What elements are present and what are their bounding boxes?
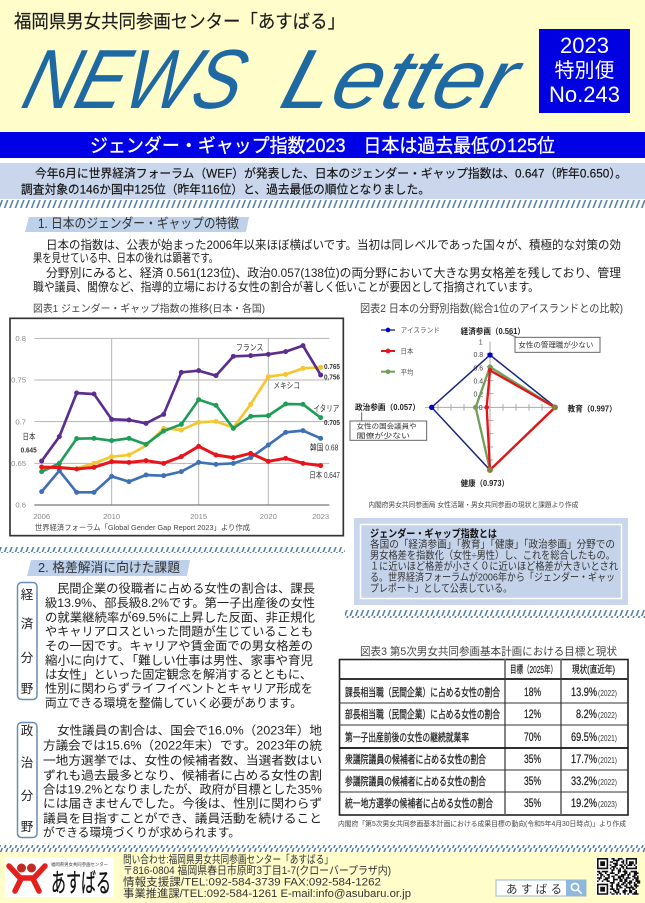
table header: 現状(直近年) <box>572 663 615 676</box>
table row labels: 第一子出産前後の女性の継続就業率 <box>345 730 469 744</box>
axis labels: 2015 <box>190 512 207 521</box>
axis labels: 0.7 <box>15 417 26 426</box>
politics field text: 方議会では15.6%（2022年末）です。2023年の統 <box>43 738 322 752</box>
tag: economic field: 経 <box>21 588 34 602</box>
callout: definition <box>354 518 628 605</box>
header band <box>0 0 645 132</box>
axis labels: 0.65 <box>11 459 26 468</box>
economic field text: 両立できる環境を整備していく必要があります。 <box>45 695 302 710</box>
table current values: 13.9% <box>571 685 597 699</box>
series labels: 日本 0.647 <box>309 470 340 480</box>
series: average <box>476 367 555 470</box>
callout: managers: 女性の管理職が少ない <box>518 340 593 349</box>
series: Italy <box>42 400 321 472</box>
callout: managers <box>508 334 600 352</box>
table years: (2021) <box>598 756 617 765</box>
table current values: 17.7% <box>571 752 597 766</box>
table years <box>598 689 617 809</box>
table row labels: 課長相当職（民間企業）に占める女性の割合 <box>345 685 500 699</box>
politics field text: ずれも過去最多となり、候補者に占める女性の割 <box>43 768 322 782</box>
issue badge: 特別便 <box>554 59 614 82</box>
table header <box>510 663 615 676</box>
politics field text: には届きませんでした。今後は、性別に関わらず <box>43 796 322 810</box>
contact details: 問い合わせ:福岡県男女共同参画センター「あすばる」 <box>123 852 333 866</box>
logo figure <box>9 864 45 891</box>
axis labels: 2010 <box>103 512 120 521</box>
section 1 heading: 1. 日本のジェンダー・ギャップの特徴 <box>38 216 239 231</box>
series: Iceland <box>432 355 556 470</box>
tag: politics field: 政 <box>21 724 34 738</box>
tag: politics field: 分 <box>21 789 34 803</box>
figure 3: targets table <box>339 659 628 815</box>
section 1 body text: 果を見せている中、日本の後れは顕著です。 <box>33 250 218 265</box>
table row labels: 統一地方選挙の候補者に占める女性の割合 <box>345 796 493 810</box>
legend: アイスランド <box>401 327 440 335</box>
axis labels: 2020 <box>260 512 277 521</box>
axis ticks <box>473 339 483 412</box>
tag: politics field: 治 <box>21 756 34 770</box>
figure 3 caption: 図表3 第5次男女共同参画基本計画における目標と現状 <box>360 644 617 658</box>
table years: (2022) <box>598 778 617 787</box>
economic field text: の就業継続率が69.5%に上昇した反面、非正規化 <box>45 610 315 624</box>
figure 2 caption: 図表2 日本の分野別指数(総合1位のアイスランドとの比較) <box>360 301 623 315</box>
table years: (2021) <box>598 734 617 743</box>
contact details: 〒816-0804 福岡県春日市原町3丁目1-7(クローバープラザ内) <box>123 863 391 877</box>
search box: あすばる <box>506 883 562 896</box>
definition text: 各国の「経済参画」「教育」「健康」「政治参画」分野での <box>370 538 615 550</box>
economic field text: 縮小に向けて、「難しい仕事は男性、家事や育児 <box>45 652 313 668</box>
legend <box>381 327 440 376</box>
series labels: イタリア <box>313 403 339 413</box>
economic field text: は女性」といった固定観念を解消するとともに、 <box>45 668 312 682</box>
NEWS Letter logotype <box>14 33 533 127</box>
series labels <box>21 343 340 480</box>
series: France <box>42 346 321 461</box>
QR code <box>596 857 640 896</box>
table header: 目標（2025年） <box>510 663 557 676</box>
politics field text: 議員を目指すことができ、議員活動を続けること <box>43 810 322 826</box>
table current values: 8.2% <box>576 707 597 721</box>
series labels: 0.756 <box>324 373 340 382</box>
logo: asubaru: 福岡県男女共同参画センター <box>51 861 108 868</box>
series: Korea <box>42 431 321 492</box>
figure 1: line chart <box>10 318 343 536</box>
axis ticks: 0.2 <box>473 391 483 398</box>
legend: 日本 <box>401 347 413 356</box>
table years: (2022) <box>598 711 617 720</box>
axis names: 政治参画（0.057） <box>355 402 420 412</box>
axis ticks: 0 <box>479 405 483 412</box>
tag: economic field: 分 <box>21 651 34 665</box>
table row labels: 衆議院議員の候補者に占める女性の割合 <box>345 752 486 766</box>
table targets: 18% <box>524 685 541 699</box>
politics field text <box>43 724 322 840</box>
table current values: 69.5% <box>571 730 597 744</box>
axis labels <box>11 334 329 521</box>
series labels: 0.765 <box>324 362 340 371</box>
table targets: 70% <box>524 730 541 744</box>
table years: (2023) <box>598 800 617 809</box>
axis labels: 0.8 <box>15 334 26 343</box>
axis names: 教育（0.997） <box>568 404 617 414</box>
NEWS Letter logotype: NEWS <box>14 33 258 127</box>
figure 1 caption: 図表1 ジェンダー・ギャップ指数の推移(日本・各国) <box>33 302 265 315</box>
axis ticks: 0.4 <box>473 378 483 385</box>
logo: asubaru: あすばる <box>51 868 111 898</box>
axis ticks: 0.8 <box>473 352 483 359</box>
section 2 heading: 2. 格差解消に向けた課題 <box>38 560 180 575</box>
definition text: 男女格差を指数化（女性÷男性）し、これを総合したもの。 <box>370 548 615 562</box>
table targets <box>524 685 541 810</box>
legend: 平均 <box>401 367 413 376</box>
definition text: １に近いほど格差が小さく０に近いほど格差が大きいとされ <box>370 560 618 572</box>
politics field text: 女性議員の割合は、国会で16.0%（2023年）地 <box>57 724 322 738</box>
series labels: 韓国 0.68 <box>310 443 339 453</box>
headline bar <box>0 132 645 158</box>
figure 2: radar chart <box>350 326 617 509</box>
section 1 body text: 職や議員、閣僚など、指導的立場における女性の割合が著しく低いことが要因として指摘されています。 <box>33 279 539 294</box>
callout: parliament <box>350 412 427 440</box>
axis labels: 0.6 <box>15 501 26 510</box>
table years: (2022) <box>598 689 617 698</box>
issue badge <box>539 29 630 113</box>
table current values: 33.2% <box>571 774 597 788</box>
axis names: 健康（0.973） <box>461 478 509 488</box>
tag: politics field <box>18 722 37 838</box>
issue badge: 2023 <box>560 33 609 58</box>
table row labels <box>345 685 500 810</box>
tag: economic field: 済 <box>21 617 34 631</box>
series labels: 0.645 <box>21 445 37 454</box>
tag: politics field: 野 <box>21 820 34 834</box>
footer band <box>0 852 645 903</box>
axis names: 経済参画（0.561） <box>461 326 525 336</box>
contact details <box>123 852 411 900</box>
axis names <box>355 326 617 488</box>
issue badge: No.243 <box>549 82 620 107</box>
section 1 body text: 分野別にみると、経済 0.561(123位)、政治0.057(138位)の両分野において大きな男女格差を残しており、管理 <box>46 265 621 280</box>
table targets: 12% <box>524 707 541 721</box>
table row labels: 部長相当職（民間企業）に占める女性の割合 <box>345 707 500 721</box>
axis ticks: 0.6 <box>473 365 483 372</box>
politics field text: 一地方選挙では、女性の候補者数、当選者数はい <box>43 752 322 768</box>
contact details: 事業推進課/TEL:092-584-1261 E-mail:info@asubaru.or.jp <box>123 886 411 900</box>
table current values: 19.2% <box>571 796 597 810</box>
headline bar: ジェンダー・ギャップ指数2023 日本は過去最低の125位 <box>90 135 555 157</box>
intro band <box>0 163 645 199</box>
contact details: 情報支援課/TEL:092-584-3739 FAX:092-584-1262 <box>123 874 381 888</box>
intro band: 調査対象の146か国中125位（昨年116位）と、過去最低の順位となりました。 <box>21 182 430 196</box>
search box <box>496 880 586 896</box>
series: Japan <box>42 446 321 469</box>
table targets: 35% <box>524 774 541 788</box>
economic field text: その一因です。キャリアや賃金面での男女格差の <box>45 638 313 653</box>
table current values <box>571 685 597 810</box>
series labels: メキシコ <box>273 381 300 391</box>
organisation name: 福岡県男女共同参画センター「あすばる」 <box>14 11 345 32</box>
series labels: 日本 <box>23 431 36 441</box>
politics field text: ができる環境づくりが求められます。 <box>43 824 240 840</box>
economic field text <box>45 580 315 710</box>
chart source: 内閣府男女共同参画局 女性活躍・男女共同参画の現状と課題より作成 <box>368 500 579 509</box>
axis labels: 0.75 <box>11 376 26 385</box>
economic field text: 級13.9%、部長級8.2%です。第一子出産後の女性 <box>45 596 315 610</box>
series: Japan <box>487 370 555 470</box>
intro band: 今年6月に世界経済フォーラム（WEF）が発表した、日本のジェンダー・ギャップ指数は、0.647（昨年0.650）。 <box>35 166 627 180</box>
table row labels: 参議院議員の候補者に占める女性の割合 <box>345 774 486 788</box>
chart source: 世界経済フォーラム「Global Gender Gap Report 2023」より作成 <box>35 523 251 532</box>
series labels: 0.705 <box>324 418 340 427</box>
axis ticks: 1 <box>479 339 483 346</box>
tag: economic field <box>18 582 37 700</box>
NEWS Letter logotype: Letter <box>272 33 533 127</box>
logo: asubaru <box>5 857 114 898</box>
table targets: 35% <box>524 796 541 810</box>
section 1 body text <box>33 237 621 294</box>
callout: parliament: 閣僚が少ない <box>357 431 410 440</box>
economic field text: 性別に関わらずライフイベントとキャリア形成を <box>45 682 313 696</box>
callout: parliament: 女性の国会議員や <box>357 422 417 431</box>
definition text: プレポート」として公表している。 <box>370 582 512 594</box>
politics field text: 合は19.2%となりましたが、政府が目標とした35% <box>43 782 322 796</box>
series labels: フランス <box>236 343 263 353</box>
series: Mexico <box>42 367 321 469</box>
economic field text: 民間企業の役職者に占める女性の割合は、課長 <box>57 580 315 596</box>
table targets: 35% <box>524 752 541 766</box>
tag: economic field: 野 <box>21 682 34 696</box>
definition title: ジェンダー・ギャップ指数とは <box>370 527 497 540</box>
table source: 内閣府「第5次男女共同参画基本計画における成果目標の動向(令和5年4月30日時点)」より作成 <box>338 819 626 828</box>
definition text <box>370 538 618 594</box>
axis labels: 2023 <box>312 512 329 521</box>
section 1 body text: 日本の指数は、公表が始まった2006年以来ほぼ横ばいです。当初は同レベルであった国々が、積極的な対策の効 <box>46 237 621 252</box>
axis labels: 2006 <box>33 512 50 521</box>
economic field text: やキャリアロスといった問題が生じていることも <box>45 624 313 638</box>
